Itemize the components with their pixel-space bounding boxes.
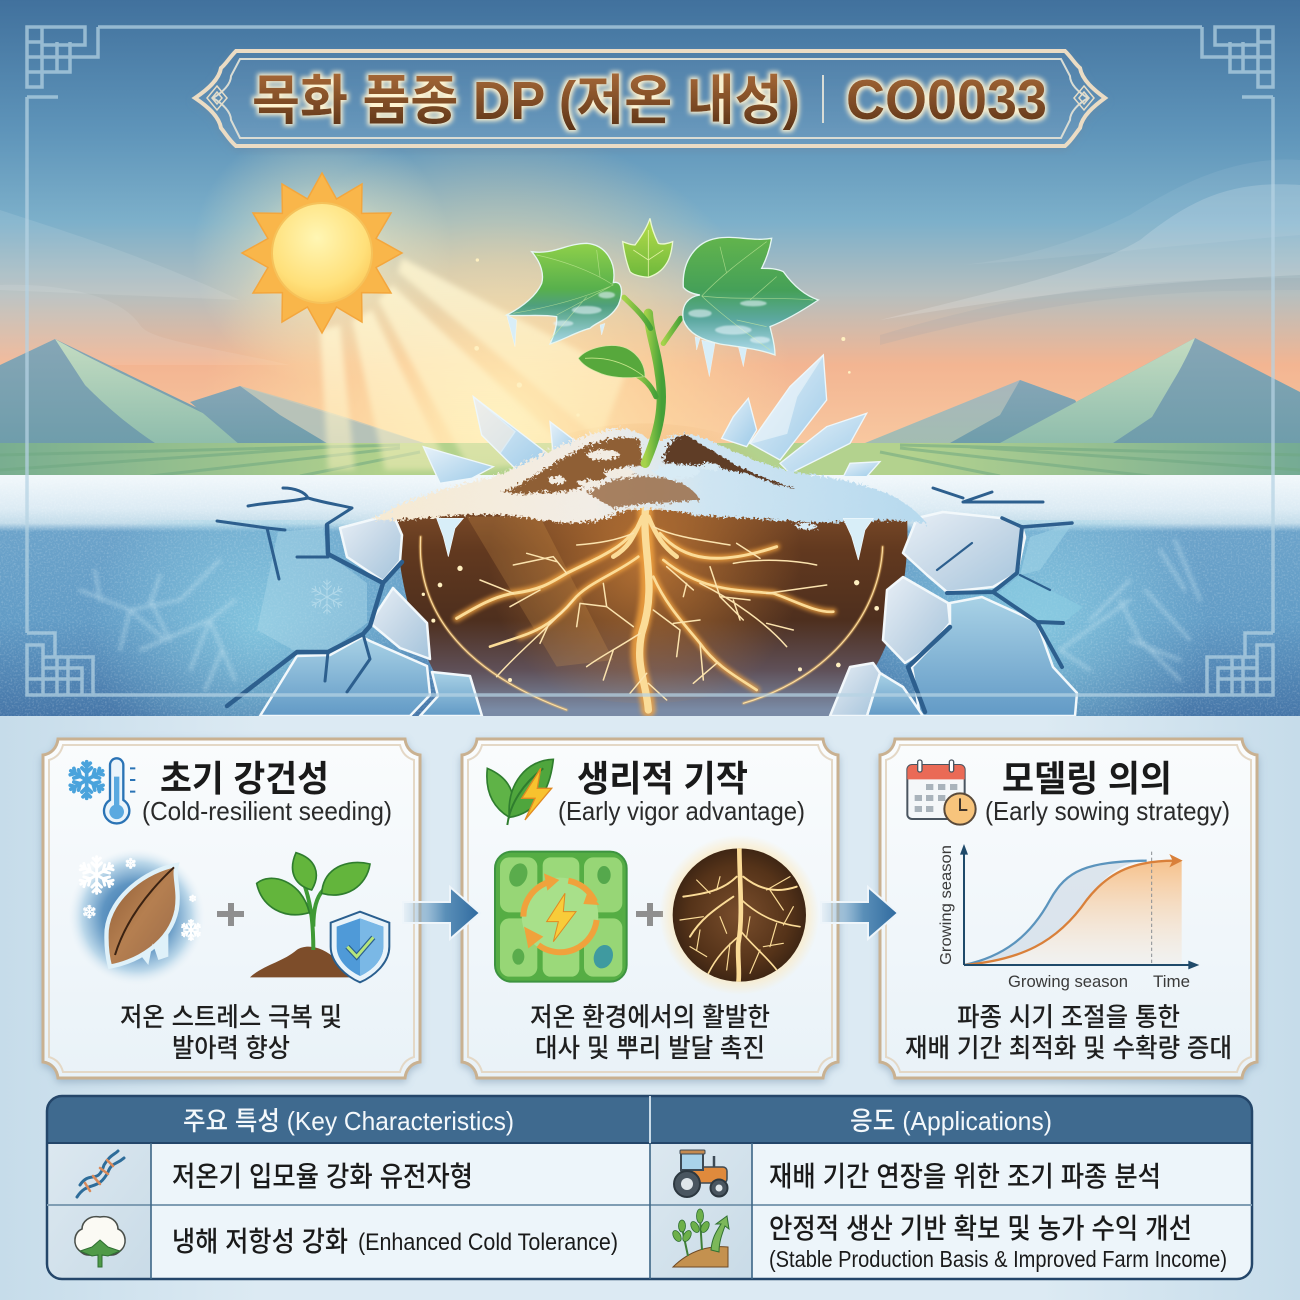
- icon: tractor: [674, 1150, 728, 1197]
- hero illustration panel: [0, 0, 1300, 720]
- frost patterns: [80, 540, 1200, 690]
- snow mound: [373, 428, 927, 523]
- title plaque: [195, 51, 1105, 146]
- mountains left: [0, 339, 430, 445]
- ice sheet: [0, 475, 1300, 716]
- sunlight rays: [320, 258, 625, 470]
- table icon columns: [47, 1143, 752, 1279]
- caption: [905, 1002, 1232, 1063]
- chart x label: Growing season: [1008, 973, 1128, 991]
- growth curve chart: [960, 844, 1199, 969]
- icon: frozen seed: [68, 848, 205, 985]
- farm field: [0, 443, 1300, 476]
- mountains right: [865, 338, 1300, 443]
- root fine branches: [480, 527, 827, 700]
- snow patches on mound: [548, 450, 817, 530]
- early sowing curve: [964, 861, 1147, 965]
- ice plates left: [257, 514, 482, 716]
- heading: 모델링 의의: [1002, 758, 1172, 799]
- icicles: [437, 518, 873, 560]
- lower panel background: [0, 716, 1300, 1300]
- panel: early resilience: [43, 739, 420, 1078]
- icon: leaf with bolt: [487, 759, 553, 825]
- row text: stable production: 안정적 생산 기반 확보 및 농가 수익 개선: [769, 1213, 1192, 1244]
- ice crystals right: [722, 355, 880, 477]
- panel: physiological mechanism: [462, 739, 838, 1078]
- root strokes: [457, 503, 833, 710]
- caption: 파종 시기 조절을 통한: [957, 1002, 1180, 1032]
- right leaf: [683, 237, 818, 377]
- plus sign: [636, 903, 663, 926]
- plaque diamonds: [207, 86, 1094, 110]
- chart time label: Time: [1153, 973, 1190, 991]
- ice plates right: [830, 512, 1083, 716]
- table header: [47, 1096, 1252, 1143]
- caption: [120, 1002, 342, 1063]
- caption: 저온 스트레스 극복 및: [120, 1002, 342, 1032]
- product code: CO0033: [846, 68, 1047, 132]
- chart y label: Growing season: [938, 845, 955, 965]
- clouds: [0, 160, 1300, 365]
- warm sunlight glow: [256, 148, 745, 443]
- ice cracks right: [908, 488, 1072, 712]
- icon: glowing roots disc: [659, 835, 819, 995]
- subheading: (Early vigor advantage): [558, 796, 805, 826]
- subheading: (Cold-resilient seeding): [142, 796, 392, 826]
- subheading: (Early sowing strategy): [985, 796, 1230, 826]
- snowflake in ice: [310, 580, 344, 614]
- soil cross-section: [397, 423, 907, 720]
- icon: seedling with shield: [250, 853, 389, 982]
- icon: cotton boll: [75, 1217, 125, 1267]
- lower leaf: [578, 346, 645, 378]
- glowing roots: [457, 500, 833, 710]
- caption: 저온 환경에서의 활발한: [530, 1002, 770, 1032]
- area between curves: [964, 861, 1147, 965]
- arrow: resilience to mechanism: [403, 887, 480, 939]
- heading: 초기 강건성: [160, 758, 329, 799]
- icon: plant cells with metabolism cycle: [495, 852, 627, 982]
- ice cracks left: [217, 488, 402, 706]
- decorative frame: [27, 27, 1273, 695]
- seedling stem: [624, 277, 681, 463]
- icon: DNA: [77, 1151, 124, 1197]
- glowing arc: [420, 537, 883, 710]
- root glow halo: [457, 500, 833, 710]
- area under late sowing curve: [964, 861, 1182, 965]
- sky background: [0, 0, 1300, 445]
- row text: cold tolerance: 냉해 저항성 강화: [172, 1226, 348, 1257]
- caption: 발아력 향상: [172, 1033, 290, 1063]
- row text: sowing analysis: 재배 기간 연장을 위한 조기 파종 분석: [769, 1161, 1161, 1192]
- icon: crops growth: [671, 1209, 729, 1267]
- row text: genotype: 저온기 입모율 강화 유전자형: [172, 1161, 473, 1192]
- sun: [206, 148, 429, 346]
- top leaf: [623, 218, 673, 277]
- icon: snowflake thermometer: [68, 758, 135, 823]
- header: key characteristics: 주요 특성 (Key Characteristics): [183, 1106, 514, 1136]
- caption: 재배 기간 최적화 및 수확량 증대: [905, 1033, 1232, 1063]
- arrow: mechanism to modeling: [821, 887, 898, 939]
- row text: stable production english: (Stable Production Basis & Improved Farm Income): [769, 1246, 1227, 1272]
- title text: 목화 품종 DP (저온 내성): [252, 71, 800, 131]
- left leaf: [507, 243, 621, 347]
- axes: [964, 850, 1193, 965]
- ice crystals left: [423, 397, 578, 483]
- row text: cold tolerance english: (Enhanced Cold Tolerance): [358, 1229, 618, 1256]
- heading: 생리적 기작: [577, 758, 748, 799]
- caption: [530, 1002, 770, 1063]
- panel: modeling significance: [880, 739, 1257, 1078]
- table: characteristics and applications: [47, 1096, 1252, 1279]
- caption: 대사 및 뿌리 발달 촉진: [535, 1033, 765, 1063]
- header: applications: 응도 (Applications): [850, 1106, 1052, 1136]
- late sowing curve: [964, 861, 1175, 965]
- plus sign: [217, 903, 244, 926]
- mound soil patches: [500, 435, 797, 508]
- central scene: seedling, crystals and root soil: [373, 218, 927, 710]
- icon: calendar and clock: [907, 760, 976, 825]
- sparkles: [422, 258, 879, 682]
